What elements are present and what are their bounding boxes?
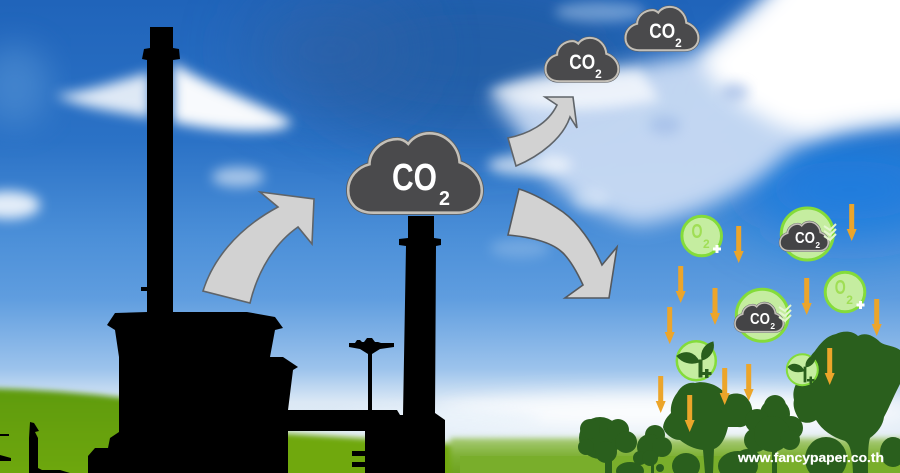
icon: O2 bubble right: 2	[846, 293, 853, 307]
arrow: up to small clouds	[508, 97, 577, 166]
upper CO2 cloud: CO	[649, 20, 675, 43]
small tree	[633, 425, 672, 473]
icon: O2 bubble right	[825, 272, 865, 312]
icon: O2 bubble right: O	[835, 277, 846, 299]
large CO2 cloud: 2	[439, 188, 450, 210]
far left tree	[578, 417, 637, 473]
small CO2 cloud: CO	[569, 51, 595, 74]
icon: CO2 bubble upper: 2	[815, 240, 820, 250]
arrow: down to trees	[508, 189, 617, 298]
middle tree	[744, 395, 803, 473]
falling orange arrows	[656, 204, 882, 432]
left tree	[663, 382, 752, 473]
icon: CO2 bubble lower: 2	[770, 321, 775, 331]
low foreground canopies	[616, 437, 900, 473]
icon: O2 bubble left	[682, 216, 722, 256]
icon: O2 bubble left: 2	[703, 237, 710, 251]
icon: sprout bubble left	[677, 341, 716, 380]
icon: CO2 bubble lower	[735, 289, 791, 341]
upper CO2 cloud	[626, 7, 698, 50]
small CO2 cloud: 2	[595, 67, 602, 81]
factory silhouette	[0, 27, 445, 473]
upper CO2 cloud: 2	[675, 36, 682, 50]
main factory building	[88, 216, 445, 473]
small CO2 cloud	[546, 38, 618, 81]
icon: sprout bubble right	[787, 354, 818, 385]
small left structures	[29, 422, 70, 473]
icon: CO2 bubble lower: CO	[750, 311, 770, 328]
left chimney	[141, 27, 180, 312]
trees	[578, 332, 900, 473]
green field	[0, 388, 900, 473]
icon: O2 bubble left: O	[692, 221, 702, 243]
arrow: chimney to cloud	[203, 192, 314, 303]
icon: CO2 bubble upper	[780, 208, 836, 260]
big right tree	[793, 332, 900, 473]
street lamp	[349, 338, 394, 410]
large CO2 cloud	[348, 133, 482, 213]
website url: www.fancypaper.co.th	[737, 450, 884, 465]
icon: CO2 bubble upper: CO	[795, 230, 815, 247]
large CO2 cloud: CO	[392, 157, 437, 199]
